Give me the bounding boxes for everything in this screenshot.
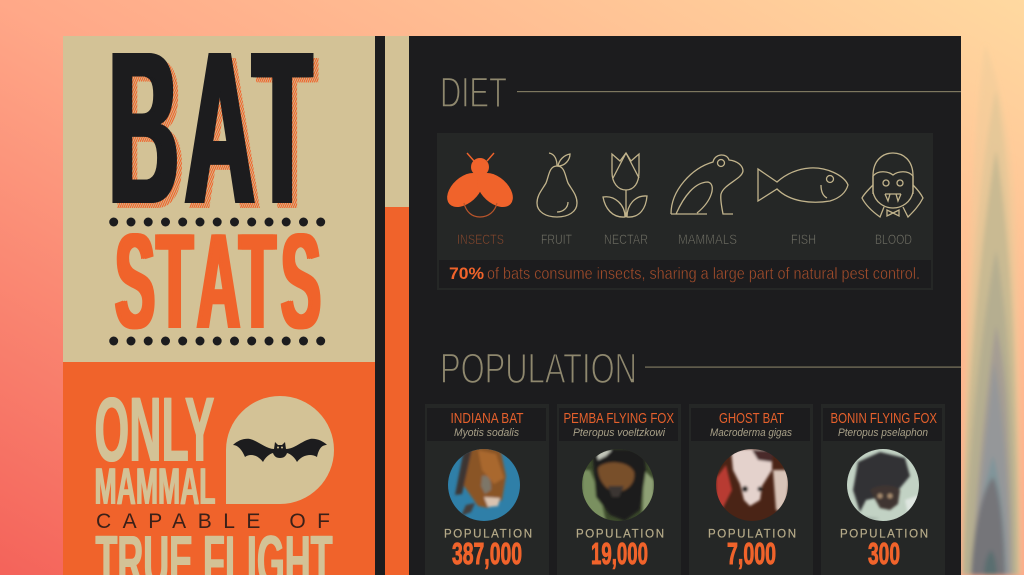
- icon: pear: [537, 153, 577, 217]
- card: Pemba flying fox: 19,000: [591, 536, 648, 571]
- card: Pemba flying fox: PEMBA FLYING FOX: [564, 411, 674, 427]
- title: BAT: BAT: [110, 6, 313, 250]
- card: Ghost bat: Macroderma gigas: [710, 427, 792, 439]
- strip: orange lower column: [385, 207, 409, 575]
- card: Bonin flying fox: 300: [868, 536, 900, 571]
- title: STATS: STATS: [113, 206, 319, 358]
- title: BAT: BAT: [113, 11, 316, 255]
- callout: only mammal capable of true flight: [94, 379, 333, 575]
- callout: only mammal capable of true flight: MAMMAL: [95, 458, 216, 516]
- title: BAT: BAT: [115, 11, 318, 255]
- card: Pemba flying fox: [557, 404, 681, 575]
- caption: insects fact: 70%: [449, 264, 484, 283]
- title: BAT: BAT: [112, 6, 315, 250]
- card: Indiana bat: POPULATION: [444, 528, 532, 540]
- photo: Bonin flying fox: [847, 449, 919, 521]
- card: Ghost bat: 7,000: [727, 536, 776, 571]
- photo: Indiana bat: [448, 447, 520, 521]
- title: BAT: BAT: [108, 6, 311, 250]
- labels: diet categories: BLOOD: [875, 231, 912, 247]
- dots: upper row: [109, 218, 325, 226]
- panel: diet: [437, 133, 933, 290]
- dots: lower row: [109, 336, 325, 346]
- icon: frog: [671, 155, 743, 214]
- icon: vampire: [862, 153, 923, 217]
- card: Pemba flying fox: POPULATION: [576, 528, 664, 540]
- rule: diet: [517, 91, 961, 92]
- card: Bonin flying fox: POPULATION: [840, 528, 928, 540]
- icon: insect: [441, 153, 519, 217]
- photo: Ghost bat: [716, 449, 790, 521]
- icon: speech bubble with bat: [226, 396, 334, 504]
- callout: only mammal capable of true flight: MAMMAL: [94, 458, 215, 516]
- labels: diet categories: MAMMALS: [678, 231, 737, 247]
- labels: diet categories: FRUIT: [541, 231, 572, 247]
- photo: Pemba flying fox: [582, 449, 654, 521]
- divider: dark vertical bar: [375, 36, 385, 575]
- card: Ghost bat: GHOST BAT: [719, 411, 784, 427]
- panel: left orange block: [63, 362, 375, 575]
- title: STATS: STATS: [117, 206, 323, 358]
- title: BAT: BAT: [111, 11, 314, 255]
- labels: diet categories: NECTAR: [604, 231, 648, 247]
- labels: diet categories: INSECTS: [457, 231, 504, 247]
- heading: DIET: DIET: [440, 69, 507, 117]
- background flame shapes: [961, 45, 1022, 575]
- title: BAT: BAT: [117, 11, 320, 255]
- labels: diet categories: [457, 231, 912, 247]
- strip: tan upper column: [385, 36, 409, 207]
- caption: insects fact: [439, 260, 931, 288]
- card: Ghost bat: [689, 404, 813, 575]
- rule: population: [645, 366, 961, 368]
- card: Pemba flying fox: Pteropus voeltzkowi: [573, 427, 666, 439]
- callout: only mammal capable of true flight: ONLY: [95, 379, 215, 481]
- title: STATS: STATS: [115, 206, 321, 358]
- card: Indiana bat: INDIANA BAT: [450, 411, 524, 427]
- card: Indiana bat: 387,000: [452, 536, 522, 571]
- icon: tulip: [603, 153, 647, 217]
- labels: diet categories: FISH: [791, 231, 816, 247]
- card: Indiana bat: Myotis sodalis: [454, 427, 519, 439]
- card: Bonin flying fox: BONIN FLYING FOX: [830, 411, 937, 427]
- caption: insects fact: of bats consume insects, sharing a large part of natural pest control.: [487, 264, 920, 283]
- card: Ghost bat: POPULATION: [708, 528, 796, 540]
- card: Bonin flying fox: Pteropus pselaphon: [838, 427, 928, 439]
- card: Bonin flying fox: [821, 404, 945, 575]
- panel: dark main: [409, 36, 961, 575]
- icon: fish: [758, 168, 848, 202]
- callout: only mammal capable of true flight: CAPABLE OF: [96, 510, 330, 533]
- callout: only mammal capable of true flight: ONLY: [94, 379, 214, 481]
- heading: POPULATION: POPULATION: [440, 345, 637, 393]
- card: Indiana bat: [425, 404, 549, 575]
- title: BAT: BAT: [106, 6, 309, 250]
- panel: left tan title block: [63, 36, 375, 362]
